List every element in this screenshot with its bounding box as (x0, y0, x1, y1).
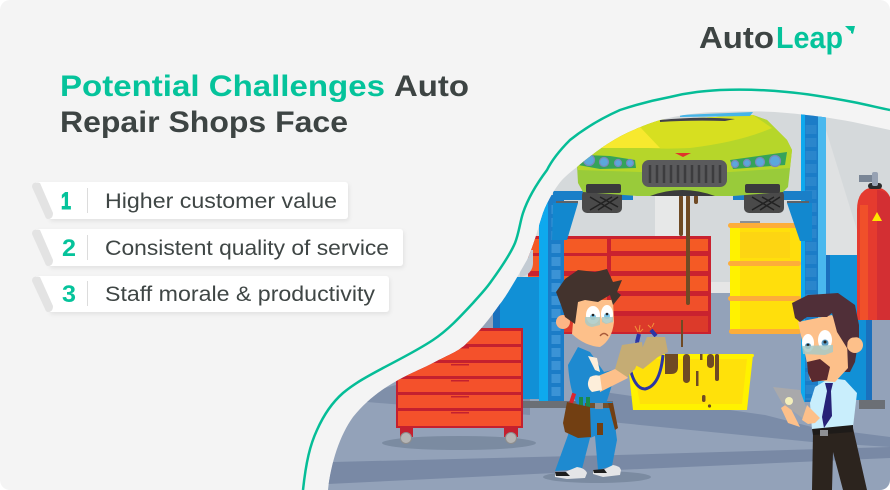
manager shirt (810, 378, 857, 430)
logo: AutoLeap: Auto (699, 20, 774, 55)
list item 1 (32, 182, 348, 219)
floor (320, 293, 890, 490)
mechanic legs (555, 400, 617, 471)
tool bag (563, 393, 591, 438)
lift arms (552, 191, 812, 241)
list item 2 (32, 229, 403, 266)
mechanic shoes (555, 465, 621, 479)
garage illustration (320, 100, 890, 490)
manager hair back (844, 337, 859, 372)
goatee (807, 359, 830, 382)
manager belt (812, 425, 853, 436)
logo: AutoLeap (699, 20, 855, 55)
car grille (642, 160, 727, 187)
mechanic belt (585, 403, 618, 435)
yellow barrel (728, 221, 801, 334)
gloved hands (615, 337, 668, 377)
car headlights (578, 152, 787, 169)
right lift post (801, 112, 885, 409)
cabinet wheels (400, 432, 516, 444)
manager trousers (812, 428, 867, 490)
list item 3 (32, 276, 389, 312)
title: Repair Shops Face (60, 106, 348, 139)
car tyres (582, 190, 784, 213)
manager character (773, 293, 867, 490)
oil pipes under car (679, 195, 698, 305)
list item 2: Consistent quality of service (105, 237, 389, 260)
yellow bucket with oil (626, 320, 754, 410)
cabinet shadow (382, 436, 536, 450)
mechanic shadow (543, 471, 651, 483)
mechanic torso (568, 347, 617, 404)
mechanic head (556, 269, 622, 347)
car body (577, 115, 792, 196)
green curve outline (303, 90, 890, 490)
wall (518, 112, 890, 293)
title (60, 70, 469, 139)
front red tool cabinet (382, 328, 536, 450)
list of challenges (32, 182, 403, 312)
mechanic shirt collar (588, 356, 600, 372)
car vents (586, 184, 780, 196)
list item 1: 1 (61, 188, 71, 215)
green car on lift (577, 112, 792, 213)
list item 3: 3 (62, 281, 76, 308)
manager tie (822, 383, 833, 428)
title: Auto (394, 70, 469, 103)
list item 2: 2 (62, 235, 76, 262)
car badge (675, 153, 691, 157)
mechanic character (543, 269, 668, 483)
list item 1: Higher customer value (105, 190, 337, 213)
list item 3: Staff morale & productivity (105, 283, 376, 306)
manager head (792, 293, 863, 382)
blue cable with sparks (631, 323, 663, 389)
left lift post (493, 195, 613, 408)
logo: AutoLeap: Leap (776, 20, 843, 55)
tablet and hands (773, 387, 820, 427)
back drawer cabinet (528, 236, 711, 334)
title: Potential Challenges (60, 70, 385, 103)
fire extinguisher (857, 172, 890, 320)
mechanic arm (588, 367, 628, 392)
